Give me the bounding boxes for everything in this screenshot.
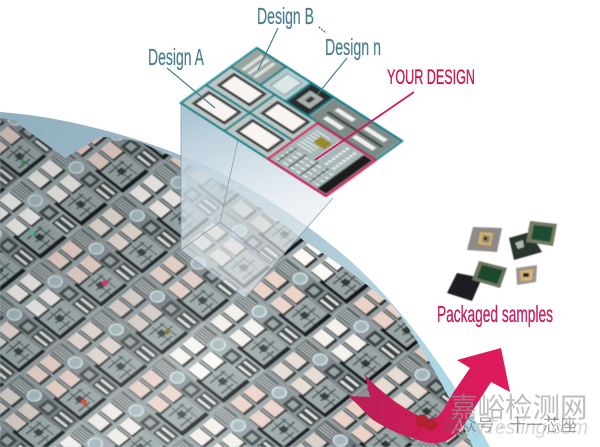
cell: glass die xyxy=(262,68,310,101)
wafer dies grid xyxy=(0,110,490,447)
cell: your design xyxy=(268,123,375,196)
stacked design reticle xyxy=(181,48,402,196)
logic colour spots xyxy=(21,147,170,405)
packaged chips xyxy=(447,221,557,301)
cell: third memory xyxy=(216,73,267,107)
watermark xyxy=(411,392,588,439)
label: Design n: Design n xyxy=(325,34,381,60)
chip: green top xyxy=(526,221,557,246)
chip: green lower xyxy=(472,261,507,288)
leader: your design xyxy=(315,92,414,160)
column edges xyxy=(181,103,333,298)
leader: Design B xyxy=(258,28,278,70)
cell: second memory xyxy=(235,119,286,153)
lower centre glow xyxy=(1,220,345,447)
leader: Design A xyxy=(167,68,215,108)
cell dividers xyxy=(181,48,402,196)
chip: black xyxy=(447,273,482,301)
chip: grey gold xyxy=(467,227,502,252)
cell: Design A xyxy=(191,91,242,125)
cell: Design B xyxy=(233,49,285,85)
leader: Design n xyxy=(317,58,347,95)
column face xyxy=(181,103,333,298)
die lattice xyxy=(0,110,490,447)
label: YOUR DESIGN: YOUR DESIGN xyxy=(387,66,475,89)
wafer rim xyxy=(0,112,490,447)
label: Design A: Design A xyxy=(148,44,204,70)
column over wafer xyxy=(181,103,333,298)
cell: Design n xyxy=(287,84,333,115)
chip: dark marked xyxy=(509,232,542,260)
arrow xyxy=(348,348,510,443)
label: Design B: Design B xyxy=(257,3,314,29)
cell: striped die xyxy=(310,99,400,158)
ellipsis dots xyxy=(319,27,326,33)
wafer xyxy=(0,103,490,447)
watermark icon xyxy=(411,414,437,437)
your design outline xyxy=(268,123,375,196)
upper left shading xyxy=(0,118,194,447)
watermark: account name: 公众号 · 十一芯座 xyxy=(443,416,577,435)
cell: fourth memory xyxy=(260,101,311,135)
watermark: latin url: AnyTesting.com xyxy=(451,417,588,439)
chip: small gold xyxy=(516,265,537,285)
watermark: site name: 嘉峪检测网 xyxy=(450,392,588,423)
reticle base xyxy=(181,48,402,196)
reticle outline xyxy=(181,48,402,196)
